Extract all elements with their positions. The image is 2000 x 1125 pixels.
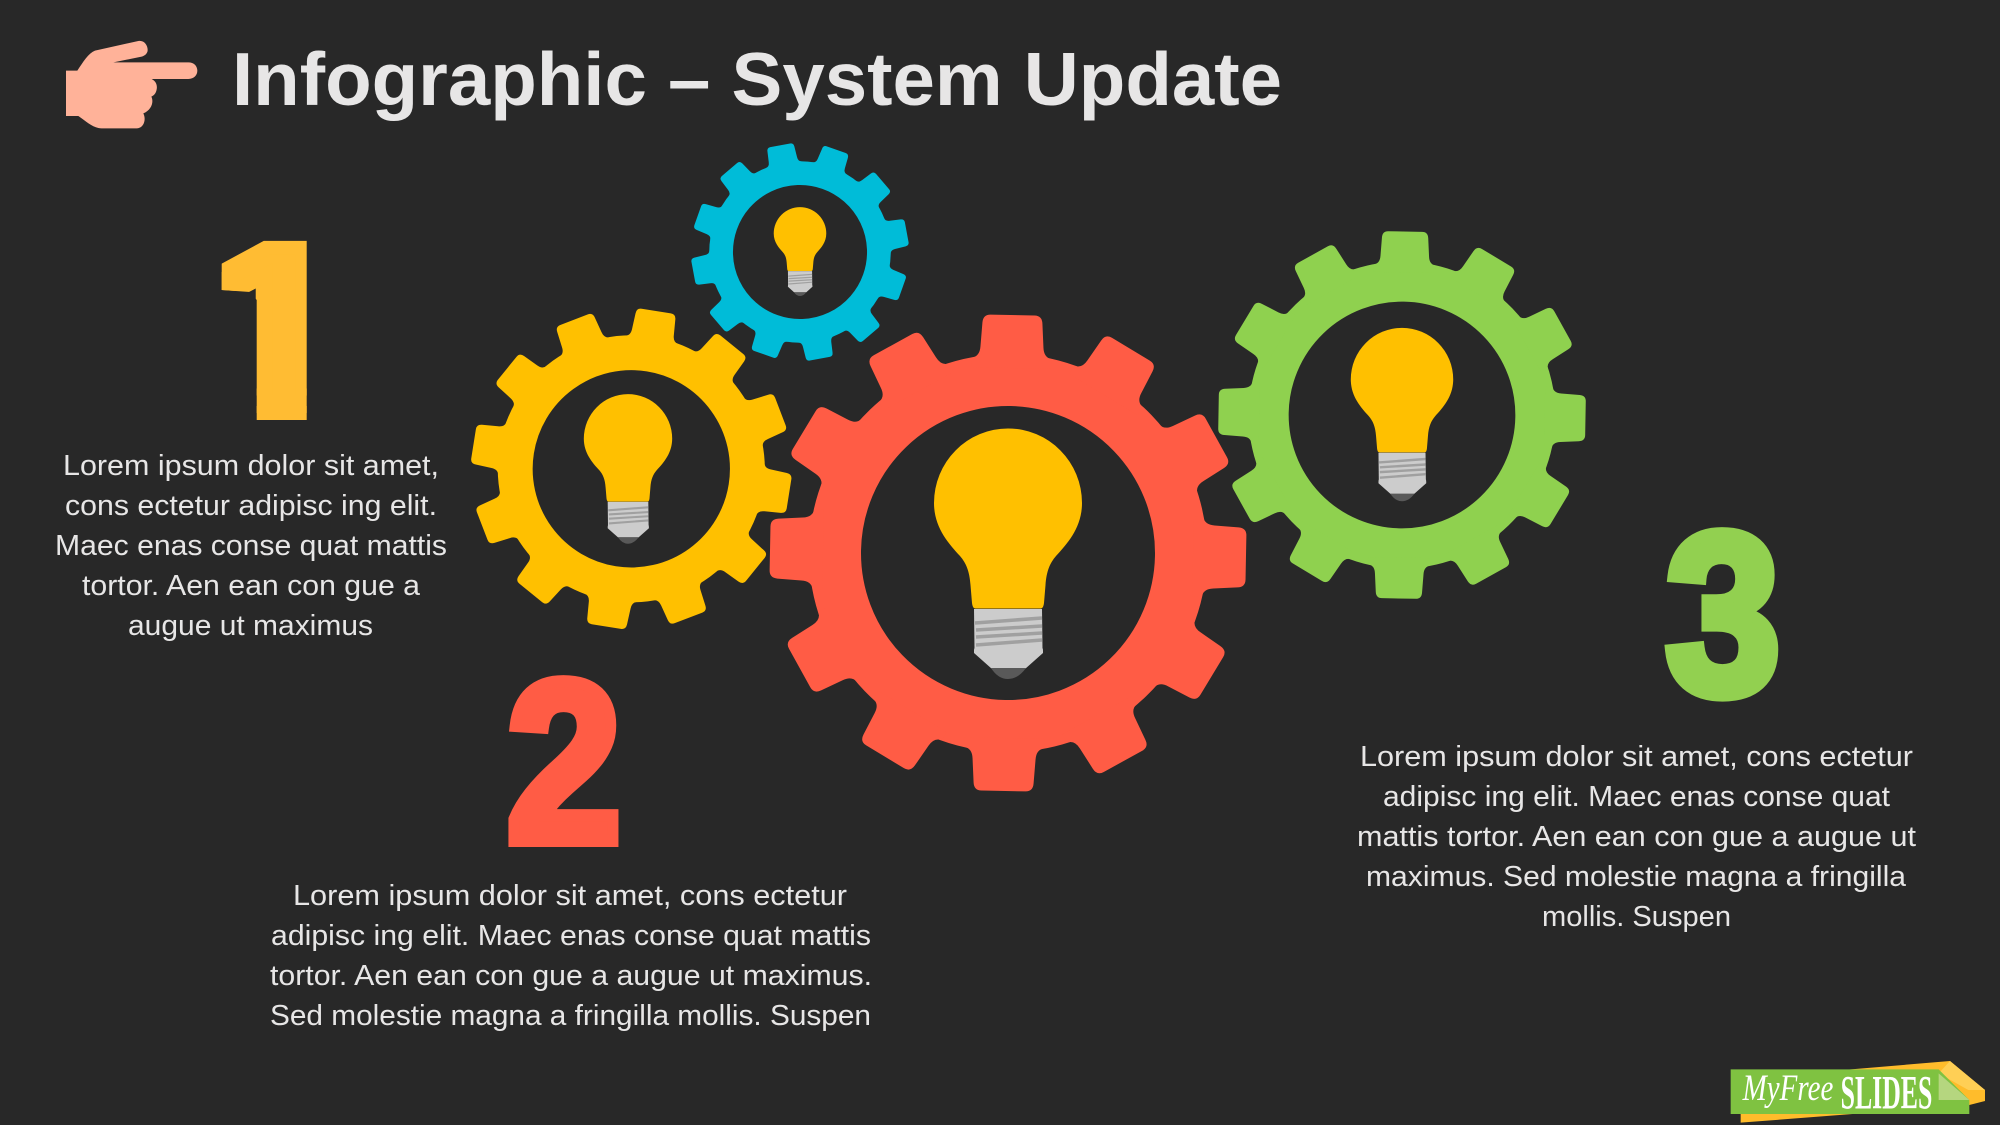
text block 3: maximus. Sed molestie magna a fringilla bbox=[1366, 861, 1907, 893]
icon: pointing hand bbox=[66, 41, 197, 128]
icon: red gear bulb bbox=[934, 428, 1082, 679]
number 3: 3 bbox=[1666, 487, 1780, 742]
number 1: 1 bbox=[197, 197, 357, 465]
gear: blue bbox=[661, 113, 939, 391]
icon: green gear bulb bbox=[1351, 328, 1453, 501]
title: Infographic – System Update bbox=[232, 37, 1282, 121]
text block 3: adipisc ing elit. Maec enas conse quat bbox=[1383, 781, 1890, 813]
text block 1: cons ectetur adipisc ing elit. bbox=[65, 490, 437, 522]
text block 1: Lorem ipsum dolor sit amet, bbox=[63, 450, 439, 482]
text block 1: augue ut maximus bbox=[128, 610, 373, 642]
text block 3 bbox=[1357, 741, 1916, 933]
text block 3: mollis. Suspen bbox=[1542, 901, 1731, 933]
text block 2: adipisc ing elit. Maec enas conse quat mattis bbox=[271, 920, 871, 952]
text block 2 bbox=[270, 880, 872, 1032]
icon: yellow gear bulb bbox=[584, 394, 672, 544]
text block 2: tortor. Aen ean con gue a augue ut maximus. bbox=[270, 960, 872, 992]
text block 2: Sed molestie magna a fringilla mollis. Suspen bbox=[270, 1000, 871, 1032]
icon: blue gear bulb bbox=[774, 207, 826, 296]
text block 3: mattis tortor. Aen ean con gue a augue ut bbox=[1357, 821, 1916, 853]
text block 3: Lorem ipsum dolor sit amet, cons ectetur bbox=[1360, 741, 1913, 773]
text block 2: Lorem ipsum dolor sit amet, cons ectetur bbox=[293, 880, 847, 912]
text block 1 bbox=[55, 450, 447, 642]
gear: red bbox=[765, 310, 1251, 796]
logo: MyFree Slides: MyFree bbox=[1742, 1068, 1833, 1109]
logo: MyFree Slides bbox=[1731, 1061, 1985, 1123]
gear: yellow bbox=[449, 286, 814, 652]
number 2: 2 bbox=[507, 635, 621, 890]
text block 1: Maec enas conse quat mattis bbox=[55, 530, 447, 562]
gear: green bbox=[1215, 228, 1589, 602]
text block 1: tortor. Aen ean con gue a bbox=[82, 570, 421, 602]
